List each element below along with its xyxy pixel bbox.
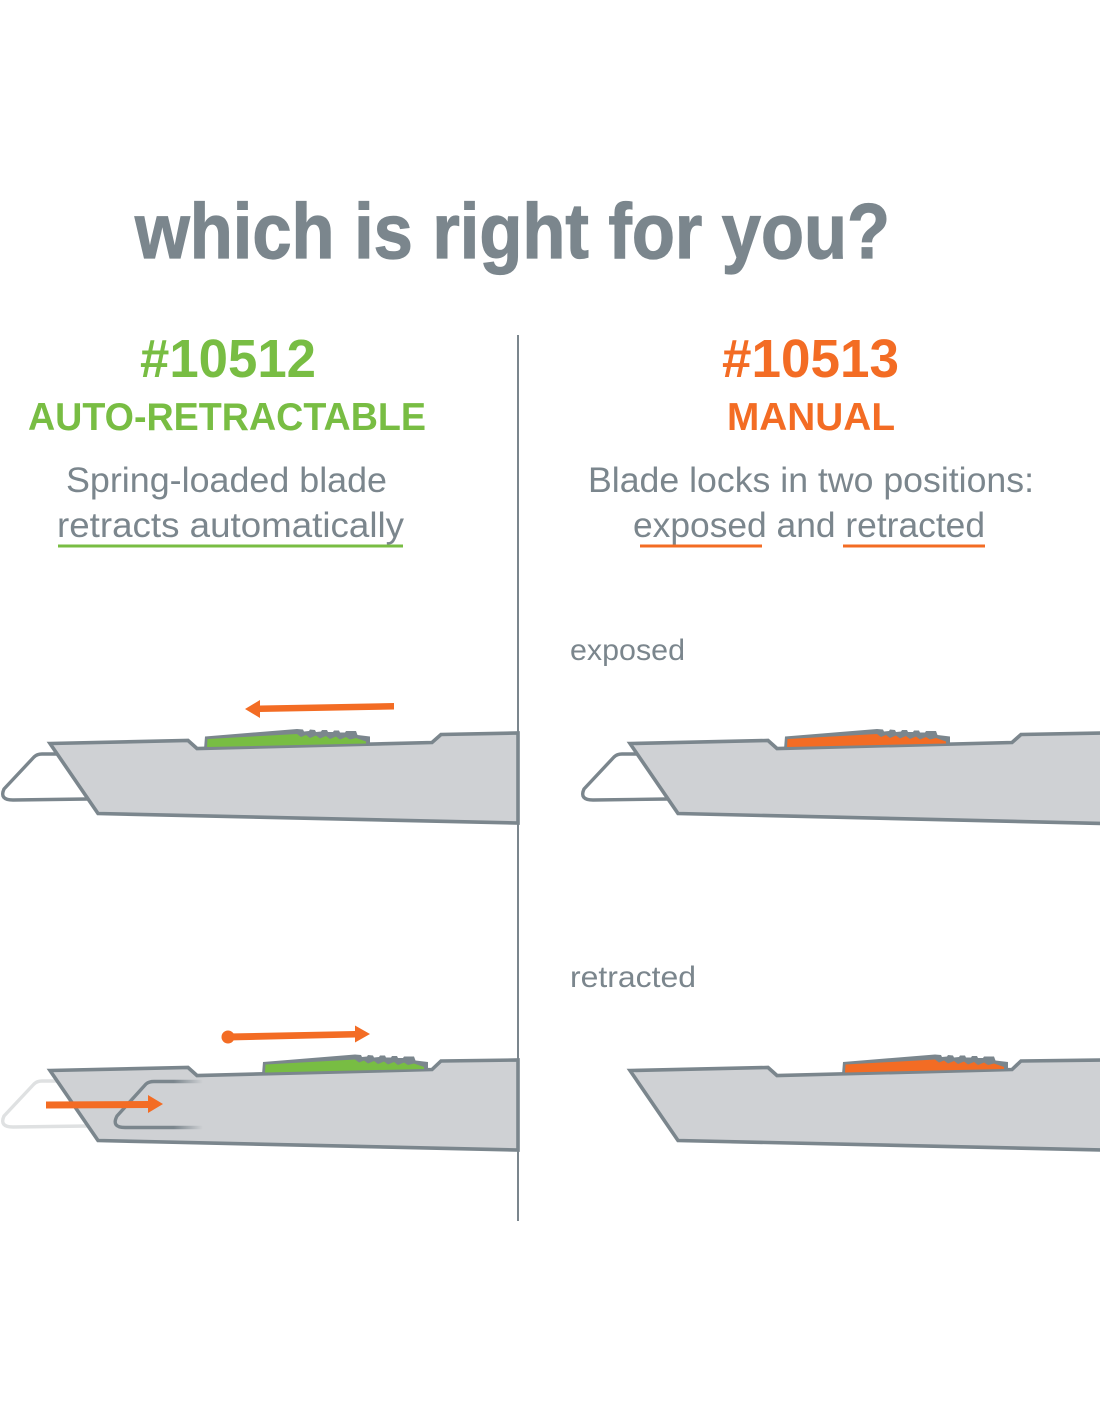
title: which is right for you? bbox=[134, 187, 890, 275]
panel: auto-retractable heading bbox=[28, 329, 426, 548]
label: auto-retractable: AUTO-RETRACTABLE bbox=[28, 396, 426, 439]
knife: manual, blade exposed bbox=[583, 729, 1100, 824]
arrow: slide forward bbox=[245, 700, 394, 718]
model number 10513: #10513 bbox=[722, 329, 899, 389]
retracted blade fading inside body bbox=[115, 1082, 203, 1128]
green slider bbox=[204, 729, 370, 749]
ghost blade bbox=[3, 1081, 88, 1127]
knife: auto-retractable, blade retracting bbox=[3, 1026, 518, 1150]
green slider bbox=[262, 1054, 428, 1074]
knife body bbox=[50, 733, 518, 823]
description line 1: Spring-loaded blade bbox=[66, 461, 387, 500]
knife body bbox=[630, 1060, 1100, 1150]
green underline bbox=[58, 544, 403, 548]
knife body bbox=[630, 733, 1100, 824]
arrow: blade retracts bbox=[46, 1095, 163, 1113]
knife body bbox=[50, 1060, 518, 1150]
model number 10512: #10512 bbox=[140, 329, 316, 389]
knife: auto-retractable, blade exposed bbox=[3, 700, 518, 823]
description line 1: Blade locks in two positions: bbox=[588, 461, 1034, 500]
description line 2: exposed and retracted bbox=[633, 506, 985, 545]
blade bbox=[583, 754, 668, 800]
orange slider bbox=[784, 729, 950, 749]
arrow: slider returns bbox=[222, 1026, 370, 1044]
label: manual: MANUAL bbox=[727, 396, 895, 439]
orange slider bbox=[842, 1054, 1008, 1074]
description line 2: retracts automatically bbox=[57, 506, 405, 545]
state label: retracted: retracted bbox=[570, 961, 696, 994]
blade bbox=[3, 754, 88, 800]
panel: manual heading bbox=[588, 329, 1034, 548]
divider between products bbox=[517, 335, 519, 1221]
underline: exposed bbox=[640, 544, 762, 548]
state label: exposed: exposed bbox=[570, 634, 685, 667]
underline: retracted bbox=[843, 544, 985, 548]
knife: manual, blade retracted bbox=[630, 1054, 1100, 1150]
